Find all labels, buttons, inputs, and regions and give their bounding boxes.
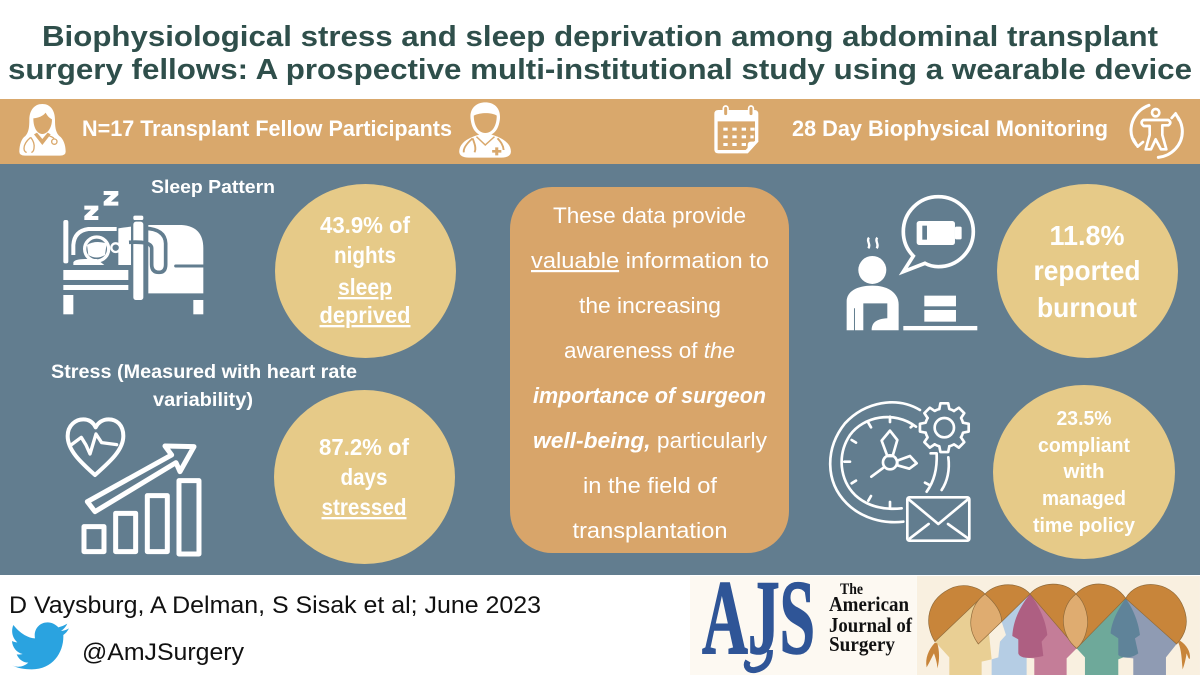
stat: reported burnout: reported <box>1034 255 1140 286</box>
stat: managed time policy: compliant <box>1038 435 1130 457</box>
logo: American Journal of Surgery <box>690 559 916 675</box>
panel: conclusion: transplantation <box>572 518 728 543</box>
stat: sleep deprived: 43.9% of <box>320 212 410 238</box>
stat: days stressed: days <box>340 464 388 490</box>
stat: days stressed: stressed <box>322 494 406 520</box>
panel: conclusion: well-being, particularly <box>533 428 767 453</box>
stat: sleep deprived <box>275 184 456 358</box>
stat: days stressed: 87.2% of <box>319 434 409 460</box>
heading: stress: variability) <box>153 390 253 411</box>
title: Biophysiological stress and sleep deprivation among abdominal transplant <box>42 21 1158 53</box>
panel: conclusion: importance of surgeon <box>533 383 766 408</box>
icon: female doctor <box>19 104 66 156</box>
icon: calendar <box>714 106 758 153</box>
heading: sleep pattern: Sleep Pattern <box>151 177 275 197</box>
authors: D Vaysburg, A Delman, S Sisak et al; June 2023 <box>9 592 541 619</box>
stat: reported burnout <box>997 184 1178 358</box>
panel: conclusion: awareness of the <box>564 338 735 363</box>
stat: reported burnout: 11.8% <box>1050 220 1125 251</box>
panel: conclusion: in the field of <box>583 473 718 498</box>
icon: heart rate and rising bars <box>68 419 199 554</box>
twitter handle: @AmJSurgery <box>82 639 244 666</box>
panel: conclusion: valuable information to <box>531 248 769 273</box>
panel: conclusion: These data provide <box>553 203 746 228</box>
stat: sleep deprived: deprived <box>320 302 410 328</box>
logo: AJS monogram: AJS <box>702 559 815 675</box>
stat: sleep deprived: nights <box>334 242 396 268</box>
stat: managed time policy: managed <box>1042 488 1126 510</box>
stat: managed time policy: with <box>1062 461 1104 483</box>
stat: sleep deprived: sleep <box>338 274 392 300</box>
logo: journal name: Journal of <box>829 613 913 637</box>
logo: AJS monogram <box>702 559 815 675</box>
stat: managed time policy <box>993 385 1175 559</box>
title: surgery fellows: A prospective multi-institutional study using a wearable device <box>8 54 1192 86</box>
icon: clock, gear and envelope <box>830 402 969 541</box>
stat: managed time policy: 23.5% <box>1056 408 1112 430</box>
stat: reported burnout: burnout <box>1037 292 1137 323</box>
logo: journal name <box>829 581 913 656</box>
band text: participants: N=17 Transplant Fellow Participants <box>82 116 452 141</box>
panel: conclusion: the increasing <box>579 293 721 318</box>
panel: main findings background <box>0 164 1200 575</box>
illustration: five profile heads <box>917 576 1200 675</box>
logo: journal name: American <box>829 592 909 616</box>
heading: stress: Stress (Measured with heart rate <box>51 362 357 383</box>
icon: sleeping patient in bed <box>63 191 203 314</box>
icon: body with rotation arrows <box>1131 105 1182 157</box>
stat: managed time policy: time policy <box>1033 515 1136 537</box>
icon: burnt-out person with low battery <box>847 197 977 330</box>
heading: stress <box>51 362 357 411</box>
logo: journal name: Surgery <box>829 632 895 656</box>
panel: study overview band <box>0 99 1200 164</box>
logo: journal name: The <box>840 581 863 598</box>
stat: days stressed <box>274 390 455 564</box>
icon: male doctor <box>459 102 511 158</box>
panel: conclusion <box>510 187 789 553</box>
icon: twitter bird <box>12 622 69 669</box>
band text: monitoring: 28 Day Biophysical Monitoring <box>792 116 1108 141</box>
title <box>8 21 1192 86</box>
